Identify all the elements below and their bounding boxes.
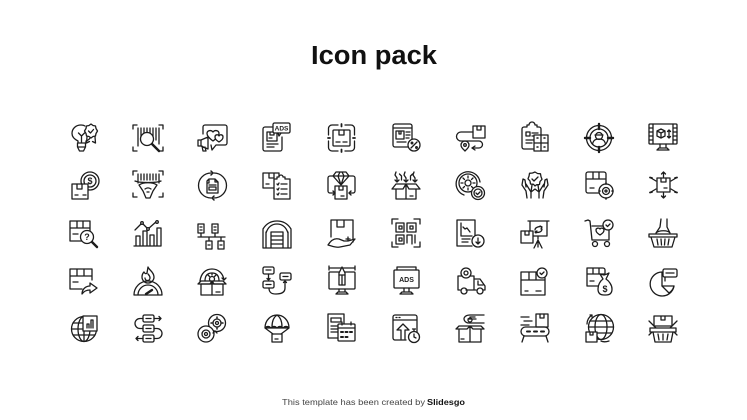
icon: diamond and parcel cycle xyxy=(328,172,355,199)
icon: browser upload with stopwatch xyxy=(393,315,420,342)
icon: document with calendar xyxy=(328,314,355,341)
icon: hands holding badge xyxy=(522,172,548,198)
icon: parcel with check badge xyxy=(521,268,547,295)
icon: parcel with question magnifier: ? xyxy=(84,232,90,242)
icon: parcel with question magnifier xyxy=(70,221,97,247)
icon: conveyor belt xyxy=(521,314,549,342)
icon: monitor with ads xyxy=(394,267,419,294)
icon: monitor with pen tool xyxy=(329,266,355,294)
icon: parcel and presentation board xyxy=(521,221,549,248)
icon: pie chart with label xyxy=(650,269,677,296)
icon: organization chart xyxy=(198,224,225,249)
icon: parcel with dollar cycle xyxy=(72,172,99,199)
icon: speed gauge with flame xyxy=(134,267,162,295)
icon: parcel with outward arrows xyxy=(650,172,677,198)
icon: route from pin to parcel xyxy=(456,126,485,151)
icon: basket with hand xyxy=(649,219,677,247)
icon: clipboard with boxes xyxy=(522,122,548,151)
footer credit: Slidesgo xyxy=(427,397,465,407)
icon: parcel with money bag: $ xyxy=(602,284,608,294)
icon: document in cycle xyxy=(199,171,226,200)
icon: phone with ads bubble: ADS xyxy=(275,126,289,132)
icon: light bulb with badge xyxy=(72,124,98,151)
icon: monitor with 3d box xyxy=(649,124,677,150)
icon: bar chart with trend xyxy=(134,221,161,246)
icon: phone with ads bubble xyxy=(263,123,290,151)
icon: hand holding parcel xyxy=(328,220,355,247)
footer credit: This template has been created by xyxy=(282,397,426,407)
icon: gear with check xyxy=(456,172,484,200)
icon: open box with arrows xyxy=(392,172,420,199)
icon: target on person xyxy=(585,124,613,152)
icon: parcel with gear xyxy=(586,172,613,199)
title: Icon pack xyxy=(311,42,438,70)
icon: globe with report xyxy=(72,316,97,342)
icon: parcel in rotating frame xyxy=(328,124,355,152)
icon: shopping basket with parcel xyxy=(649,316,677,342)
icon: cart with heart parcel xyxy=(585,220,613,246)
icon: box with gear arc xyxy=(198,269,226,295)
icon: warehouse xyxy=(263,221,291,248)
icon: monitor with ads: ADS xyxy=(399,277,414,284)
icon: delivery truck with gear xyxy=(458,268,485,294)
icon: barcode with magnifier xyxy=(133,125,163,151)
icon: two gears xyxy=(198,314,226,342)
icon: megaphone with hearts message xyxy=(198,125,227,151)
icon: QR code xyxy=(392,219,420,247)
icon: parcel with money bag xyxy=(587,268,612,295)
icon: hand dropping into box xyxy=(456,315,484,342)
icon: parachute with parcel xyxy=(265,315,289,342)
icon: flow chart xyxy=(263,267,291,294)
icon: parcel with dollar cycle: $ xyxy=(87,176,93,186)
icon grid xyxy=(70,122,677,342)
icon: parcel with forward arrow xyxy=(70,269,97,294)
icon: barcode scanner xyxy=(133,171,163,198)
icon: web page with percent xyxy=(393,124,420,151)
icon: report with down arrow xyxy=(457,220,484,247)
icon: parcel with checklist xyxy=(263,173,290,199)
icon: globe with parcel xyxy=(586,314,614,342)
icon: list with cycling arrows xyxy=(135,315,162,342)
